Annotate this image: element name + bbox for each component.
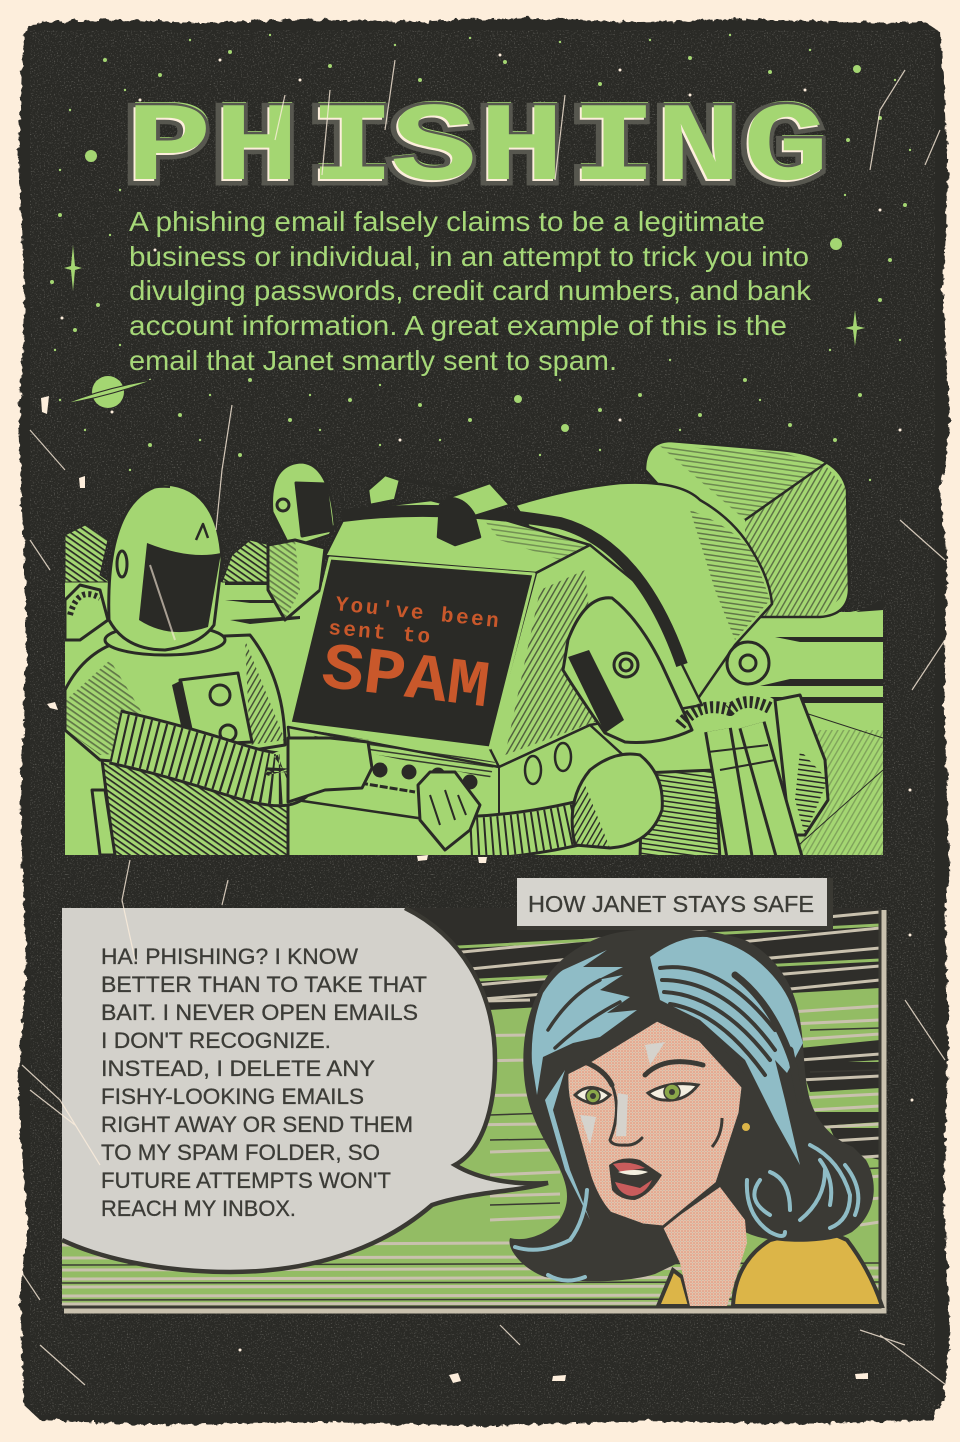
computer screen xyxy=(290,558,534,748)
icon: sparkle stars xyxy=(64,245,865,346)
face xyxy=(567,1020,743,1227)
hair silhouette xyxy=(509,929,874,1281)
panel border xyxy=(64,910,884,1311)
speech text: FISHY-LOOKING EMAILS xyxy=(101,1084,364,1109)
panel background with speed lines xyxy=(62,908,880,1308)
lips xyxy=(609,1158,662,1200)
computer rear housing xyxy=(645,441,849,617)
icon: ringed planet xyxy=(64,376,153,408)
speech text xyxy=(101,944,427,1221)
speech text: INSTEAD, I DELETE ANY xyxy=(101,1056,375,1081)
cheek line xyxy=(712,1118,722,1147)
speech text: TO MY SPAM FOLDER, SO xyxy=(101,1140,380,1165)
speech bubble xyxy=(62,908,548,1272)
speech text: HA! PHISHING? I KNOW xyxy=(101,944,358,969)
computer shell xyxy=(288,475,772,830)
intro text: divulging passwords, credit card numbers, and bank xyxy=(129,275,812,306)
title: PHISHING xyxy=(127,84,829,211)
intro text xyxy=(129,206,812,376)
control buttons xyxy=(372,762,478,790)
panel title label: HOW JANET STAYS SAFE xyxy=(528,891,814,917)
screen text: SPAM xyxy=(318,631,493,726)
speech text: BAIT. I NEVER OPEN EMAILS xyxy=(101,1000,418,1025)
speech text: I DON'T RECOGNIZE. xyxy=(101,1028,331,1053)
screen text xyxy=(322,596,498,706)
title: PHISHING xyxy=(124,88,827,215)
moon ground xyxy=(65,525,883,860)
intro text: email that Janet smartly sent to spam. xyxy=(129,345,617,376)
speech text: REACH MY INBOX. xyxy=(101,1196,296,1221)
speech text: RIGHT AWAY OR SEND THEM xyxy=(101,1112,413,1137)
screen text: You've been xyxy=(334,594,500,634)
intro text: A phishing email falsely claims to be a legitimate xyxy=(129,206,765,237)
neck xyxy=(663,1187,747,1306)
earring xyxy=(741,1122,751,1132)
shirt xyxy=(733,1228,882,1306)
left astronaut xyxy=(65,484,372,860)
screen text: sent to xyxy=(327,618,431,650)
intro text: account information. A great example of this is the xyxy=(129,310,787,341)
blue hair strands xyxy=(532,937,803,1220)
speech text: BETTER THAN TO TAKE THAT xyxy=(101,972,427,997)
oxygen tanks and gauge xyxy=(680,642,828,860)
right astronaut xyxy=(418,598,720,860)
panel title label xyxy=(517,878,833,930)
intro text: business or individual, in an attempt to trick you into xyxy=(129,241,809,272)
title: PHISHING xyxy=(124,88,827,215)
eyes and brows xyxy=(575,1062,703,1103)
illustration: astronauts at computer xyxy=(65,441,883,860)
nose xyxy=(610,1085,642,1145)
woman portrait: Janet xyxy=(509,929,882,1306)
comic panel xyxy=(62,908,884,1311)
speech text: FUTURE ATTEMPTS WON'T xyxy=(101,1168,391,1193)
second astronaut helmet xyxy=(268,462,335,620)
dark hair strokes xyxy=(548,967,800,1100)
title: PHISHING xyxy=(126,86,829,213)
